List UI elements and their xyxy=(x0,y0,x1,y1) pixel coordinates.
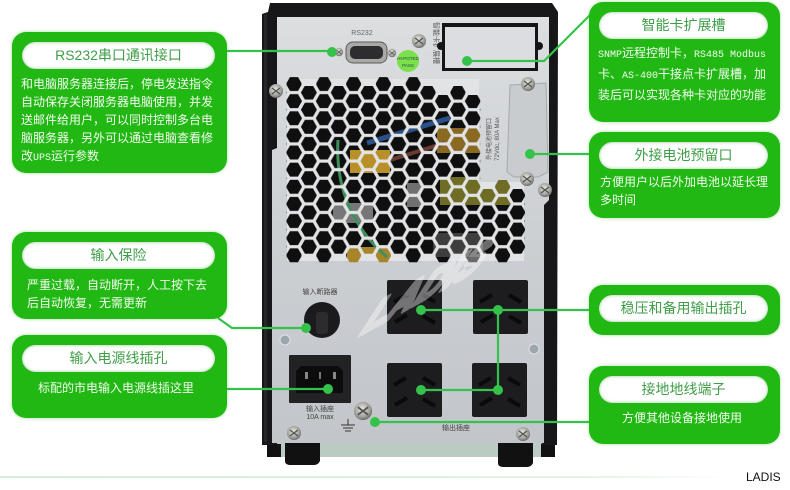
AC input socket: 输入插座 xyxy=(306,404,334,413)
heading: smart card slot: 智能卡扩展槽 xyxy=(642,17,726,33)
text: input fuse description xyxy=(27,278,207,310)
Hi-pot sticker: PASS xyxy=(402,63,414,68)
screws xyxy=(269,77,552,441)
heading: RS232 xyxy=(22,42,215,69)
ground terminal xyxy=(341,402,372,431)
card slot label: 智能卡扩展槽 xyxy=(432,22,441,64)
input breaker xyxy=(302,287,340,338)
brand label: LADIS xyxy=(746,470,781,484)
RS232 port xyxy=(335,30,396,63)
text: smart card description: SNMP远程控制卡，RS485 Modbus xyxy=(598,46,766,61)
heading: external battery xyxy=(599,142,768,169)
text: smart card description: 卡、AS-400干接点卡扩展槽，加 xyxy=(598,67,766,82)
AC input socket xyxy=(289,355,351,421)
watermark: LADIS xyxy=(351,226,505,347)
panel: output sockets xyxy=(589,285,780,335)
text: input fuse description: 严重过载，自动断开，人工按下去 xyxy=(27,278,207,292)
text: power inlet description: 标配的市电输入电源线插这里 xyxy=(38,381,194,395)
leader dots xyxy=(301,47,535,427)
text: RS232 description: 和电脑服务器连接后，停电发送指令 xyxy=(21,77,213,91)
text: RS232 description: 脑服务器，另外可以通过电脑查看修 xyxy=(21,131,213,145)
heading: power inlet: 输入电源线插孔 xyxy=(70,350,168,366)
output sockets: 输出插座 xyxy=(442,423,470,432)
battery port labels: 外接电池预留口 xyxy=(485,118,493,160)
text: RS232 description: 送邮件给用户，可以同时控制多台电 xyxy=(21,113,213,127)
RS232 port: RS232 xyxy=(351,30,373,37)
Hi-pot sticker xyxy=(397,50,419,72)
heading: external battery: 外接电池预留口 xyxy=(634,147,732,163)
text: external battery description xyxy=(600,175,768,207)
heading: RS232: RS232串口通讯接口 xyxy=(55,47,182,63)
metal face plate xyxy=(272,17,549,443)
heading: output sockets xyxy=(599,295,768,322)
heading: input fuse xyxy=(22,242,215,269)
battery port labels: 72Vdc, 80A Max xyxy=(495,117,501,161)
panel: input fuse xyxy=(12,232,227,319)
text: RS232 description: 自动保存关闭服务器电脑使用，并发 xyxy=(21,95,213,109)
black frame xyxy=(262,3,558,445)
text: ground description: 方便其他设备接地使用 xyxy=(622,411,742,425)
text: RS232 description: 改UPS运行参数 xyxy=(21,149,99,164)
Hi-pot sticker: HI-POTED xyxy=(397,56,419,61)
heading: ground terminal xyxy=(599,376,768,403)
text: external battery description: 方便用户以后外加电池以延长理 xyxy=(600,175,768,189)
battery port labels xyxy=(485,117,501,161)
panel: smart card slot xyxy=(589,2,780,122)
heading: output sockets: 稳压和备用输出插孔 xyxy=(620,300,746,316)
text: external battery description: 多时间 xyxy=(600,193,636,207)
text: RS232 description xyxy=(21,77,213,164)
panel: ground terminal xyxy=(589,366,780,444)
panel: RS232 xyxy=(12,32,227,173)
heading: smart card slot xyxy=(599,12,768,39)
cabinet base strip xyxy=(278,440,542,457)
heading: input fuse: 输入保险 xyxy=(90,247,146,263)
grid highlight xyxy=(287,79,524,261)
text: input fuse description: 后自动恢复，无需更新 xyxy=(27,296,147,310)
UPS cabinet xyxy=(262,3,558,467)
leader lines xyxy=(218,15,590,422)
battery port cover xyxy=(507,83,548,177)
panel: power inlet xyxy=(12,335,227,418)
faint footer rule xyxy=(0,476,730,478)
output sockets xyxy=(387,280,528,432)
dim rivets xyxy=(280,335,539,354)
heading: power inlet xyxy=(22,345,215,372)
panel: external battery xyxy=(589,132,780,218)
heading: ground terminal: 接地地线端子 xyxy=(642,381,726,397)
input breaker: 输入断路器 xyxy=(302,287,338,296)
AC input socket: 10A max xyxy=(306,414,334,421)
rear feet xyxy=(267,443,555,467)
text: smart card description xyxy=(598,46,766,102)
smart card slot xyxy=(437,23,543,71)
text: smart card description: 装后可以实现各种卡对应的功能 xyxy=(598,88,766,102)
ventilation grid with internal parts xyxy=(286,77,525,263)
